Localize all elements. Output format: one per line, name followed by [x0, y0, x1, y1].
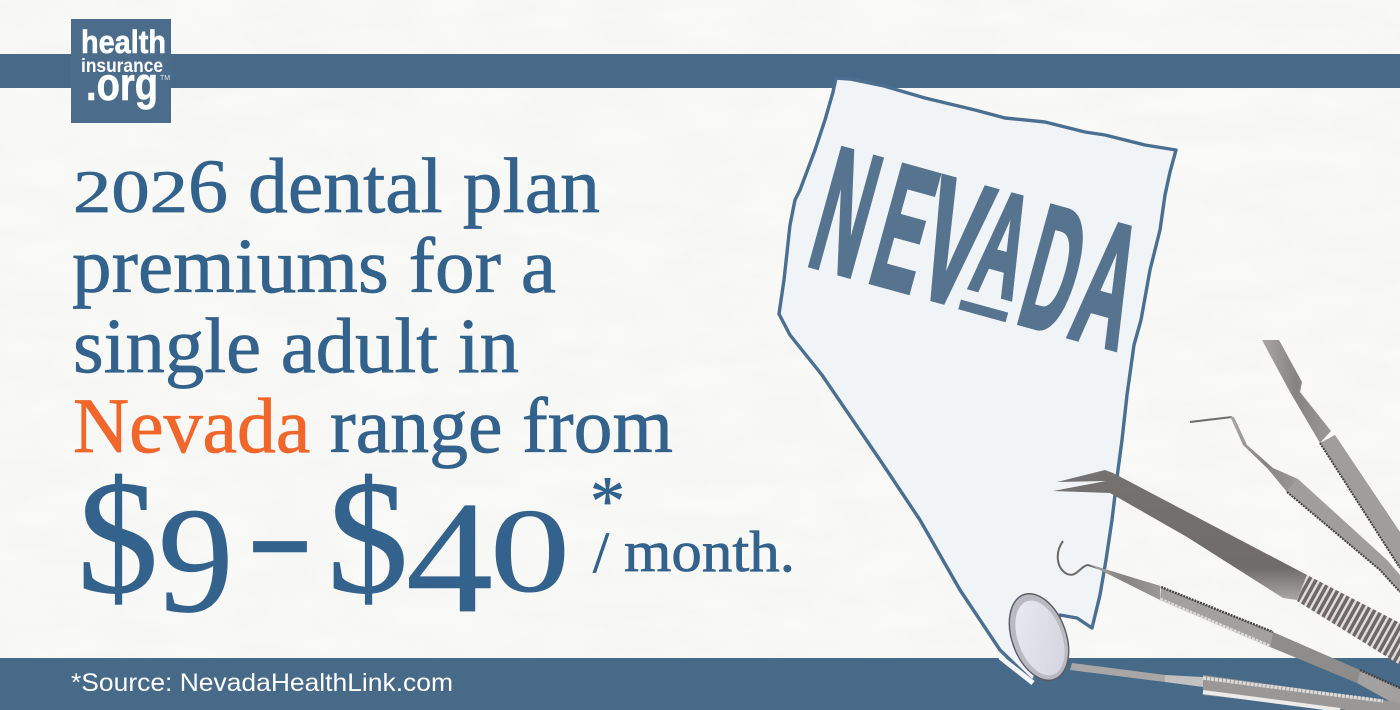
- price range: $: [327, 448, 408, 628]
- price range: –: [256, 486, 304, 588]
- headline: 6: [188, 145, 228, 229]
- asterisk: *: [590, 463, 625, 540]
- price range: [77, 448, 625, 646]
- tool: dental mirror: [998, 585, 1400, 710]
- tool: hook probe: [1058, 541, 1400, 707]
- state name NEVADA: V: [900, 140, 1008, 345]
- state name NEVADA: D: [1004, 169, 1104, 371]
- state name NEVADA: E: [855, 128, 954, 330]
- headline: dental plan: [248, 142, 600, 229]
- state name NEVADA: A: [1056, 183, 1160, 387]
- Nevada state map: [779, 78, 1176, 683]
- tool: tweezers: [1053, 470, 1400, 665]
- headline: [72, 142, 673, 469]
- headline: Nevada range from: [73, 382, 673, 469]
- price range: $: [77, 448, 158, 628]
- state name NEVADA: [795, 112, 1160, 387]
- headline: premiums for a: [72, 222, 556, 309]
- tool: spatula: [1262, 340, 1400, 568]
- headline: single adult in: [73, 302, 519, 389]
- logo: healthinsurance.org: TM: [160, 75, 170, 82]
- bottom banner bar: [0, 658, 1400, 710]
- price range: 4: [406, 468, 493, 646]
- logo: healthinsurance.org: [71, 19, 171, 123]
- logo: healthinsurance.org: .org: [86, 58, 158, 110]
- dental tools: [998, 340, 1400, 710]
- per month label: /: [593, 520, 610, 585]
- state tip over bar: [1000, 657, 1033, 683]
- state name NEVADA: A: [959, 160, 1048, 329]
- top banner bar: [0, 54, 1400, 88]
- price range: 9: [158, 476, 234, 644]
- logo: healthinsurance.org: insurance: [81, 56, 163, 77]
- price range: 0: [490, 484, 570, 617]
- per month label: month.: [624, 519, 795, 584]
- logo: healthinsurance.org: health: [81, 24, 166, 60]
- headline: 202: [73, 159, 188, 225]
- tool: angled probe: [1190, 416, 1400, 592]
- underline below A: [958, 300, 1008, 322]
- state name NEVADA: N: [795, 112, 897, 314]
- source note: *Source: NevadaHealthLink.com: [71, 669, 453, 697]
